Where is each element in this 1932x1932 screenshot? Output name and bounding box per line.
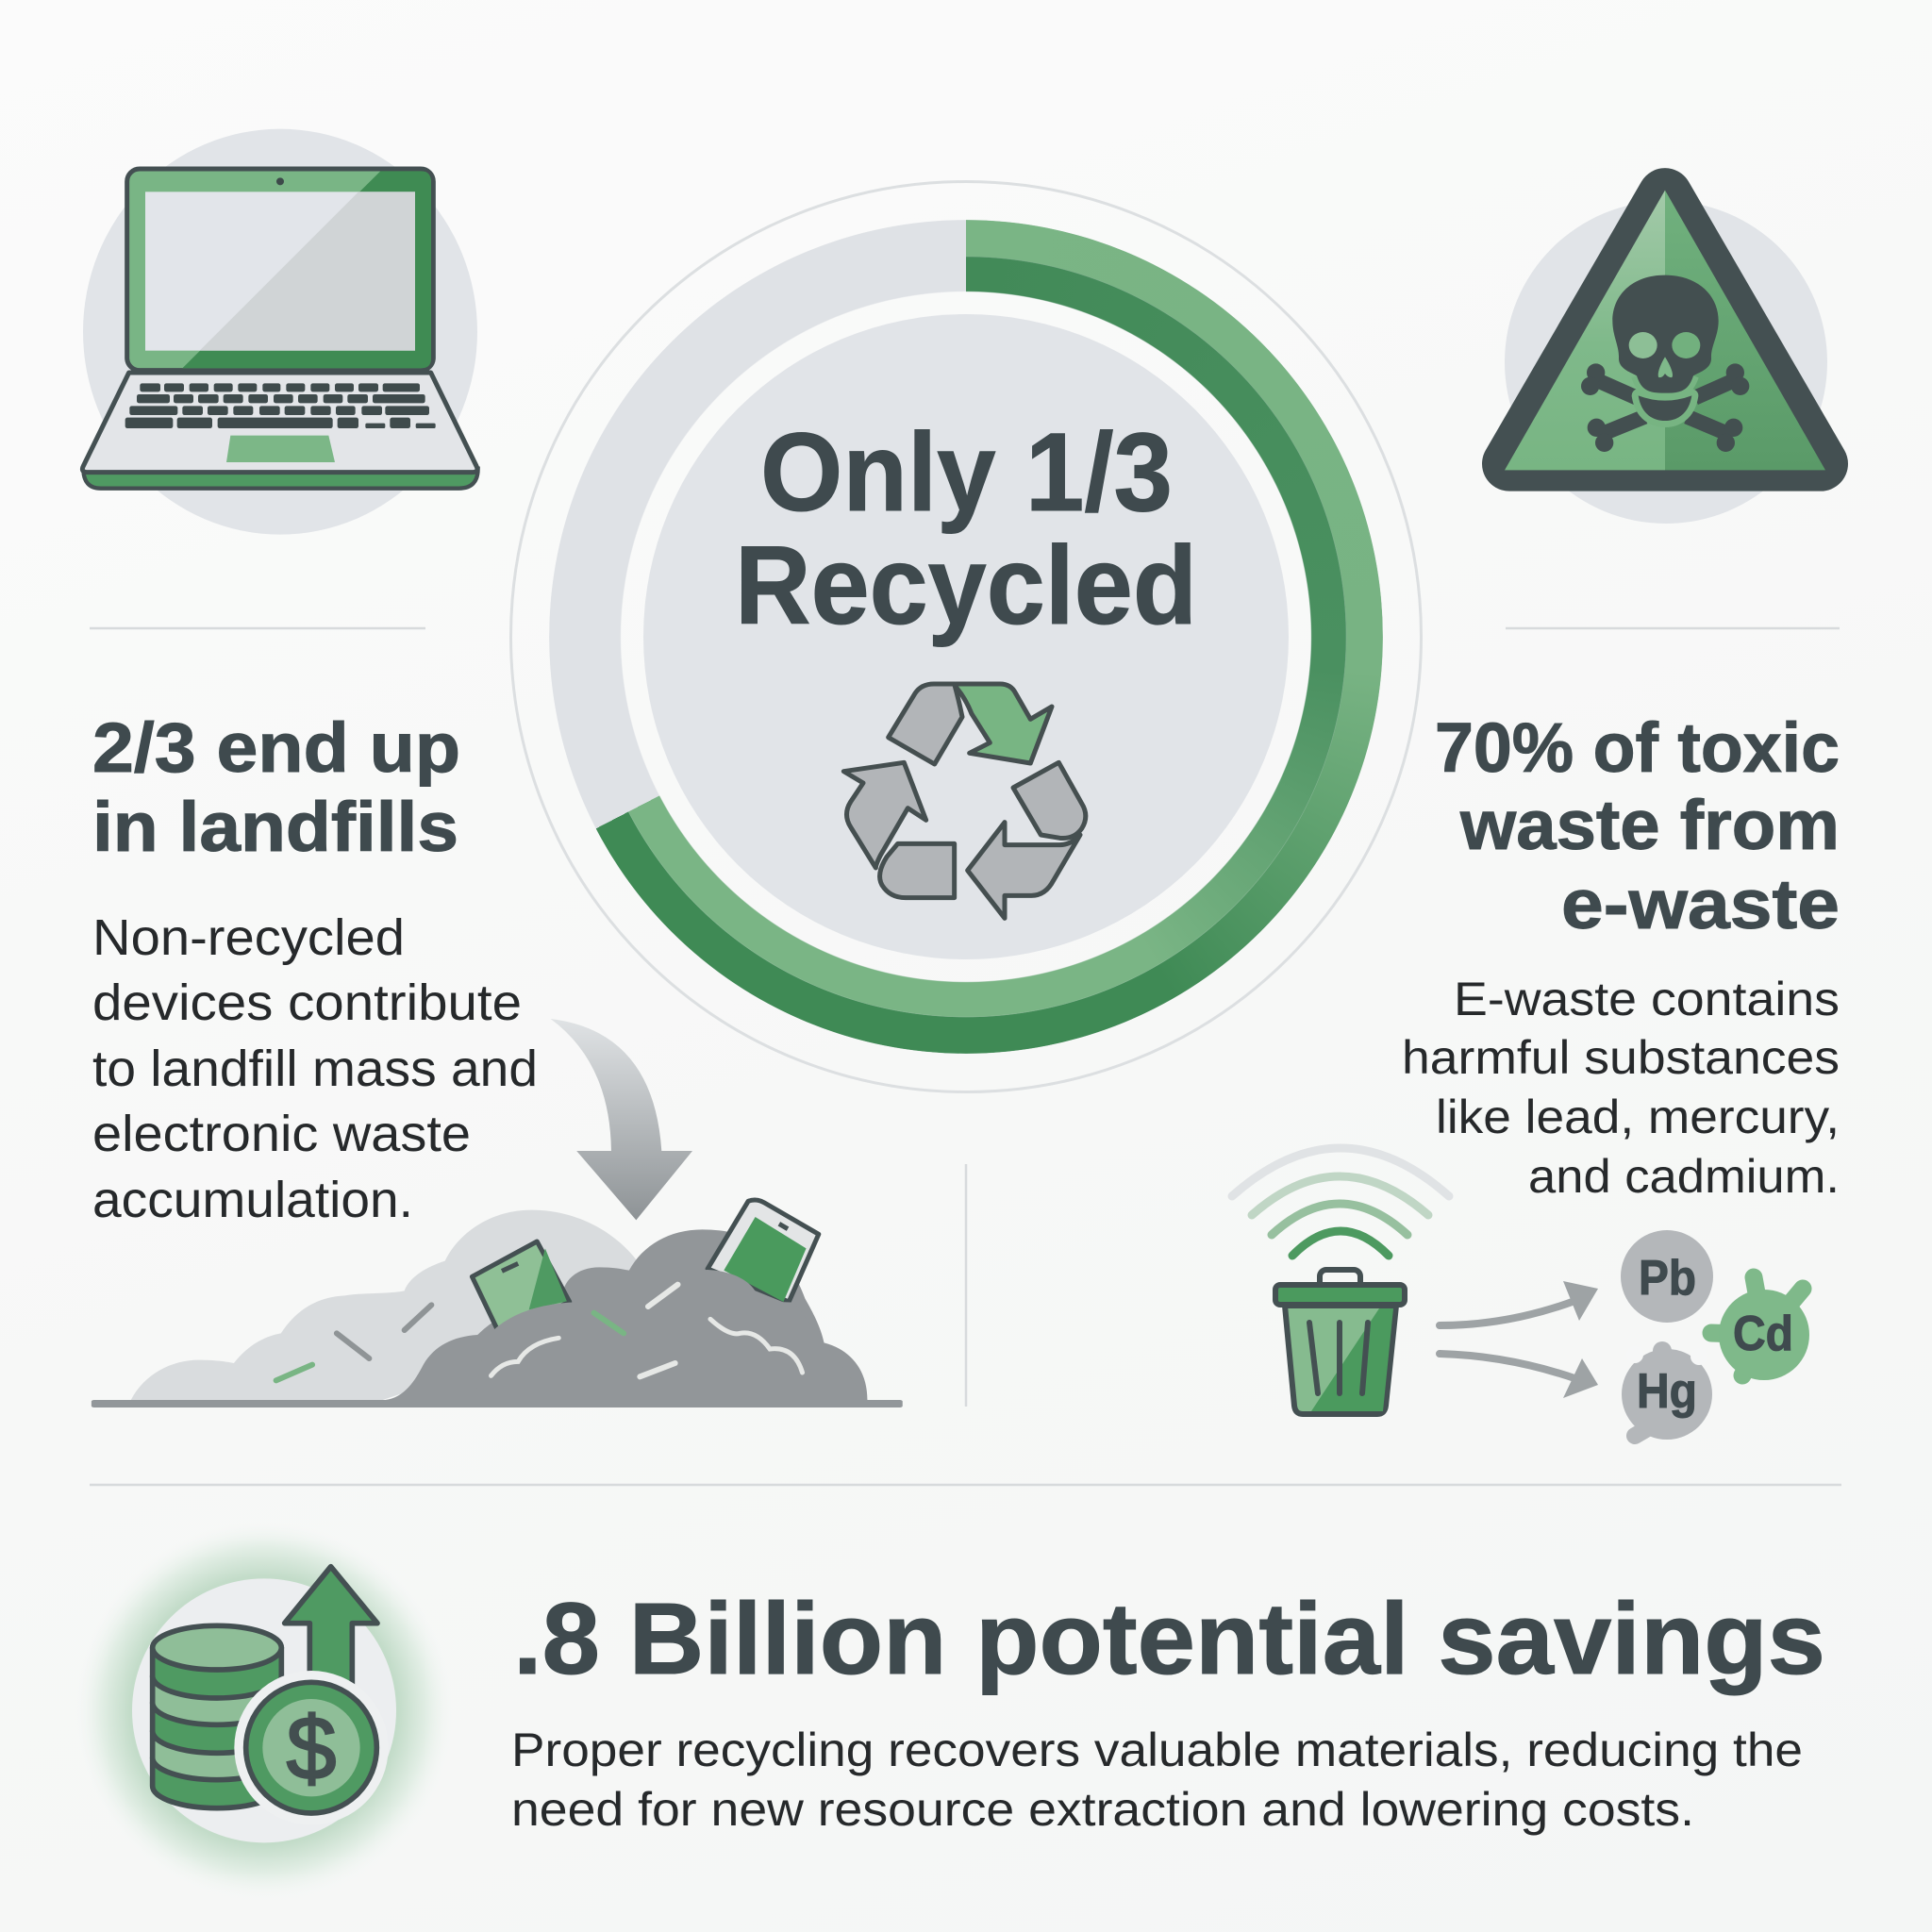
icon: radiating signal arcs [1232,1148,1449,1256]
element: Hg mercury [1622,1341,1712,1440]
main dark pile [386,1229,867,1400]
element: Cd cadmium [1711,1277,1809,1380]
illustration: landfill pile with arrow [92,1019,903,1407]
front pile [475,1270,867,1400]
section: toxic waste heading: 70% of toxic [1435,708,1840,787]
section: landfills heading: in landfills [92,788,458,866]
back pile [131,1210,637,1400]
icon: recycling symbol [843,684,1086,918]
arrow: trash to lead [1440,1281,1598,1325]
growth arrow [285,1567,377,1686]
icon: toxic warning triangle [1505,191,1827,524]
icon: money stack with coin and growth arrow [73,1519,456,1903]
phone right [708,1200,819,1302]
icon: trash can [1275,1270,1405,1414]
laptop lid [127,169,433,371]
element: Cd cadmium: Cd [1733,1307,1793,1361]
section: landfills heading: 2/3 end up [92,708,460,787]
green ring inner band [628,257,1347,1017]
text: landfills description [92,909,538,1228]
ground line [92,1400,903,1407]
green ring outer band [549,220,1383,1054]
laptop backdrop circle [83,129,477,535]
text: landfills description: to landfill mass and [92,1041,538,1097]
headline: Only 1/3 Recycled [735,410,1197,648]
outer thin ring [509,180,1423,1093]
coin stack [153,1625,281,1808]
warning backdrop circle [1505,201,1827,524]
dollar coin [234,1671,389,1824]
warning triangle frame [1509,195,1821,464]
text: landfills description: Non-recycled [92,909,405,966]
text: savings description: Proper recycling recovers valuable materials, reducing the [511,1724,1803,1776]
arrow: trash to mercury [1440,1354,1598,1398]
element: Pb lead [1621,1230,1713,1323]
phone left [472,1241,570,1333]
section: savings heading: .8 Billion potential savings [513,1581,1825,1695]
skull eyes and nose [1629,332,1700,377]
laptop trackpad [226,436,335,462]
text: savings description [511,1724,1803,1836]
grey remainder ring [549,220,966,828]
icon: laptop [82,129,478,535]
section: toxic waste heading: e-waste [1561,865,1840,943]
text: toxic waste description: and cadmium. [1528,1150,1840,1203]
text: savings description: need for new resource extraction and lowering costs. [511,1783,1694,1836]
money backdrop circle [132,1578,396,1842]
chart: central donut showing 1/3 recycled [509,180,1423,1093]
text: toxic waste description [1402,973,1840,1203]
headline: Only 1/3 Recycled: Only 1/3 [760,410,1173,535]
laptop keyboard [125,383,436,428]
text: toxic waste description: like lead, mercury, [1436,1091,1840,1143]
text: landfills description: devices contribute [92,974,522,1031]
laptop base [82,373,478,489]
section: toxic waste heading [1435,708,1840,943]
green glow [73,1519,456,1903]
triangle left half [1505,191,1665,470]
dollar coin: $ [287,1698,336,1798]
arrow into landfill [551,1019,692,1220]
text: landfills description: electronic waste [92,1106,471,1162]
section: landfills heading [92,708,460,866]
element: Hg mercury: Hg [1637,1364,1697,1419]
headline: Only 1/3 Recycled: Recycled [735,524,1197,648]
text: toxic waste description: harmful substances [1402,1031,1840,1084]
debris fragments [276,1285,803,1380]
text: toxic waste description: E-waste contains [1454,973,1840,1025]
inner disc [643,314,1289,959]
skull and crossbones [1581,275,1749,452]
text: landfills description: accumulation. [92,1172,413,1228]
element: Pb lead: Pb [1639,1251,1696,1306]
triangle right half [1665,191,1825,470]
section: toxic waste heading: waste from [1459,786,1840,864]
